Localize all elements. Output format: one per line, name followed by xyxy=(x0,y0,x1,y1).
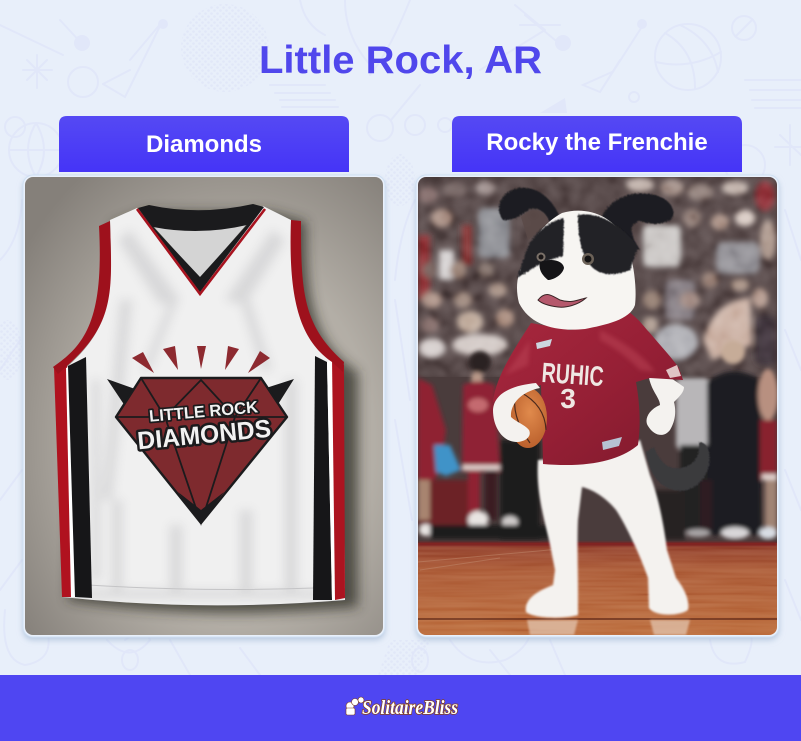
panel: Diamonds jersey xyxy=(23,175,385,637)
ears xyxy=(499,188,673,250)
logo: diamond xyxy=(107,378,294,523)
tail xyxy=(646,442,710,491)
shirt badges xyxy=(536,339,681,450)
left side stripes xyxy=(54,357,92,598)
jersey shadow xyxy=(68,212,358,613)
basketball xyxy=(509,388,547,448)
jersey body xyxy=(62,206,345,605)
title: Little Rock, AR xyxy=(259,39,542,82)
tab heading: Diamonds xyxy=(59,116,349,172)
logo: rays xyxy=(132,346,270,373)
jersey backdrop xyxy=(25,177,383,635)
shirt lettering: RUHIC xyxy=(541,357,605,392)
logo text: LITTLE ROCK xyxy=(148,398,259,426)
tab heading: Rocky the Frenchie xyxy=(452,116,742,172)
basketball court floor xyxy=(418,542,777,635)
legs and feet xyxy=(526,440,688,618)
crowd mottling xyxy=(418,177,777,377)
shirt xyxy=(493,312,683,465)
head xyxy=(517,211,636,330)
crowd: left players xyxy=(418,378,446,480)
tab heading: Diamonds: Diamonds xyxy=(146,131,262,158)
left arm and hand xyxy=(493,383,540,442)
footer logo: SolitaireBliss: SolitaireBliss xyxy=(362,698,458,719)
eyes and nose xyxy=(536,252,594,280)
panel: Rocky the Frenchie mascot xyxy=(416,175,779,637)
shirt lettering: 3 xyxy=(560,383,576,414)
left armhole trim xyxy=(53,221,111,374)
face patches xyxy=(517,214,638,278)
jersey fabric folds xyxy=(60,230,350,598)
crowd background xyxy=(418,177,778,547)
right side stripes xyxy=(313,356,345,600)
shirt sheen xyxy=(509,332,652,372)
mascot xyxy=(493,188,710,618)
shirt lettering xyxy=(542,362,604,408)
collar xyxy=(137,204,265,294)
right arm and hand xyxy=(646,376,684,435)
tab heading: Rocky the Frenchie: Rocky the Frenchie xyxy=(486,129,708,156)
right armhole trim xyxy=(291,220,344,372)
logo text: DIAMONDS xyxy=(136,415,272,455)
footer band xyxy=(0,675,801,741)
logo card icon xyxy=(346,697,364,715)
halftone dot patterns xyxy=(0,4,430,675)
mouth xyxy=(538,295,586,307)
jersey hem line xyxy=(88,585,314,589)
crowd: right spectators xyxy=(676,378,710,450)
